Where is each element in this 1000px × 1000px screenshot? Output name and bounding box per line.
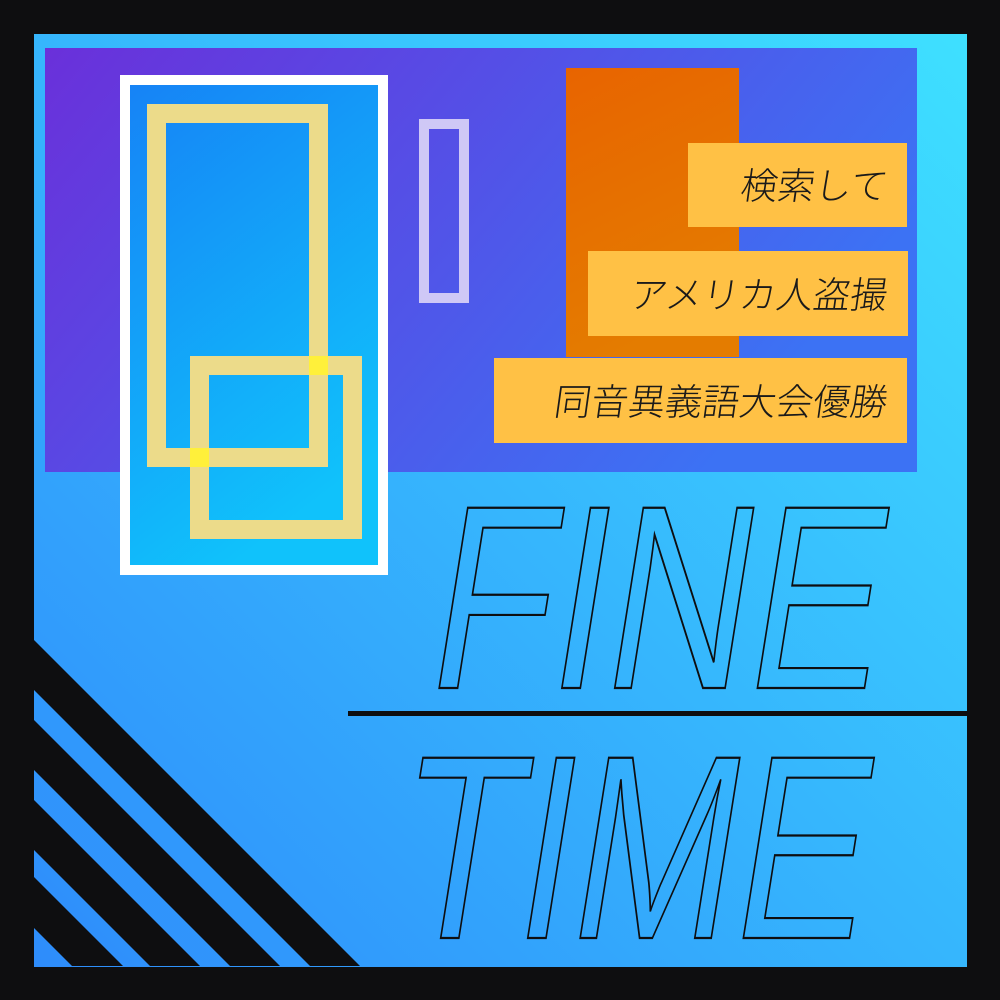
label: アメリカ人盗撮: アメリカ人盗撮 — [628, 274, 890, 316]
diagonal stripes — [34, 640, 360, 966]
labels — [494, 143, 908, 443]
label: アメリカ人盗撮 — [588, 251, 908, 336]
label: 検索して: 検索して — [738, 165, 891, 207]
lavender small rectangle — [424, 124, 464, 298]
label: 検索して — [688, 143, 907, 227]
label: 同音異義語大会優勝: 同音異義語大会優勝 — [552, 381, 890, 423]
panel: purple header block — [45, 48, 917, 472]
divider line — [348, 711, 967, 716]
yellow rectangle outlines — [156, 114, 352, 530]
orange block — [566, 68, 739, 357]
overlap highlights — [190, 356, 328, 467]
label: 同音異義語大会優勝 — [494, 358, 907, 443]
frame: white outlined rectangle — [125, 80, 383, 570]
